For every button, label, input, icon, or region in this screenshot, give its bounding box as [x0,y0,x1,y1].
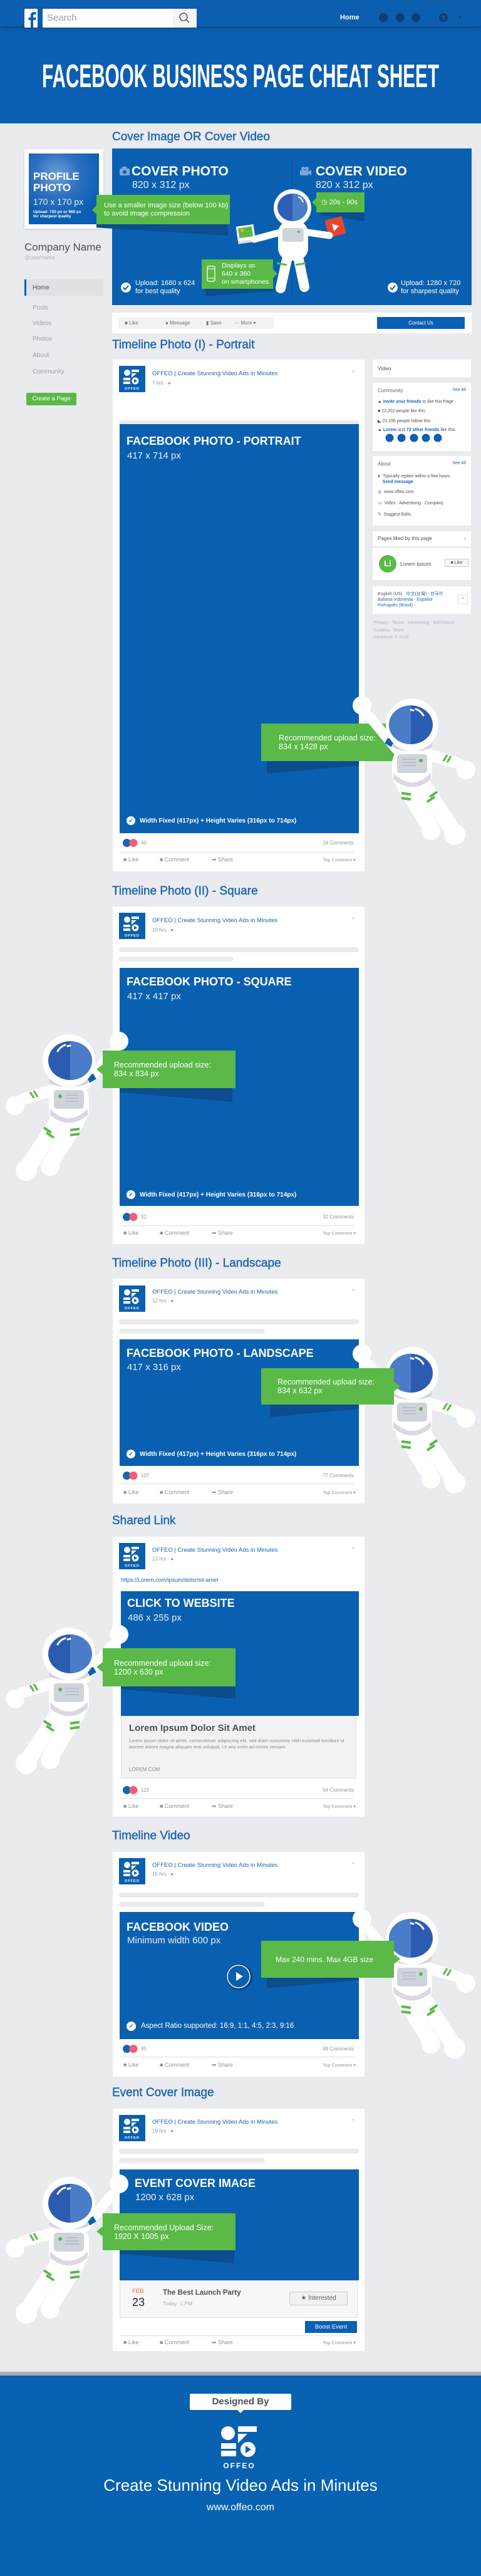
callout: 20s-90s: ◷ 20s - 90s [321,199,358,206]
post header: 19 hrs · ● [152,2128,173,2134]
upload note right: Upload: 1280 x 720 [401,279,460,287]
astronaut: square (left) [6,1032,128,1181]
post card: shared link [113,1537,365,1817]
upload note left [121,279,195,295]
post header [119,913,356,939]
sidebar: about: ✎ Suggest Edits [378,512,411,517]
post header: 10 hrs · ● [152,927,173,933]
sidebar: community [373,383,471,451]
boost event button: Boost Event [315,2324,347,2330]
profile photo box [24,149,103,229]
post header: OFFEO [125,1307,140,1311]
callout: event [103,2213,235,2250]
cover photo label [120,164,229,190]
callout: smartphones [202,259,273,289]
designed by badge: Designed By [212,2396,269,2407]
photo: square: FACEBOOK PHOTO - SQUARE [127,975,292,988]
designed by badge [190,2394,291,2410]
event info: FEB [132,2288,143,2295]
page action bar: ··· More ▾ [234,320,256,326]
post header: OFFEO [125,1879,140,1883]
photo icon [236,224,256,244]
post footer: portrait: ➦ Share [212,856,233,863]
callout: event: Recommended Upload Size: [114,2223,214,2231]
post card: landscape [113,1279,365,1504]
search box [43,9,197,28]
post footer: video: 48 Comments [323,2046,354,2052]
heading: event cover: Event Cover Image [112,2086,214,2099]
post footer: square: ■ Like [123,1230,138,1236]
callout: landscape: Recommended upload size: [277,1378,375,1386]
contact us button: Contact Us [408,320,433,326]
post footer: landscape: ➦ Share [212,1489,233,1495]
link preview text: LOREM.COM [129,1767,160,1772]
post card: shared link: Top Comment ▾ [323,1804,356,1809]
event cover frame [120,2169,359,2280]
photo: landscape: Width Fixed (417px) + Height Varies (316px to 714px) [140,1451,296,1458]
post header: OFFEO [125,387,140,391]
sidebar: community: ◣ 22,195 people follow this [378,419,430,423]
create a page button [26,393,76,405]
heading: square: Timeline Photo (II) - Square [112,885,258,898]
post header: ⌄ [351,1544,356,1550]
create a page button: Create a Page [32,395,71,402]
callout: portrait [261,724,394,761]
post card: shared link: ■ Like [123,1803,138,1809]
page action bar: ● Message [165,320,190,326]
sidebar: languages: + [461,595,465,601]
post footer: portrait: ■ Like [123,856,138,863]
callout: square [103,1051,235,1088]
sidebar: about: ◎ www.offeo.com [378,490,413,494]
post footer: video: Top Comment ▾ [323,2062,356,2068]
post card: shared link: ➦ Share [212,1803,233,1809]
post header [119,1285,356,1312]
post header: ⌄ [351,914,356,920]
video frame: Minimum width 600 px [127,1935,220,1946]
sidebar: languages: Bahasa Indonesia · Español [378,598,433,602]
callout: landscape: 834 x 632 px [277,1386,323,1395]
text: Lorem Ipsum [400,561,432,567]
sidebar: about: ● Typically replies within a few hours [378,474,450,479]
sidebar: about: ▭ Video · Advertising · Company [378,501,443,506]
post card: event: ➦ Share [212,2339,233,2345]
post footer: landscape: 77 Comments [323,1473,354,1478]
video frame [120,1912,359,2039]
cover box: 820 x 312 px [132,180,190,190]
post header: OFFEO | Create Stunning Video Ads in Minutes [152,1289,277,1296]
callout: 20s-90s [316,192,365,212]
post footer: landscape: ■ Like [123,1489,138,1495]
sidebar: about: Send message [383,480,413,484]
post footer: square: ➦ Share [212,1230,233,1236]
photo: square: 417 x 417 px [127,991,181,1002]
post footer: video: 85 [141,2046,147,2052]
post footer: landscape: Top Comment ▾ [323,1490,356,1495]
callout: video [261,1941,394,1978]
callout: video: Max 240 mins. Max 4GB size [276,1955,373,1963]
post footer: square: 32 Comments [323,1214,354,1220]
post footer: video: ■ Like [123,2062,138,2068]
sidebar: community: See All [452,388,466,392]
post card: square [113,906,365,1244]
cover box: COVER VIDEO [316,164,407,179]
post header: ⌄ [351,1285,356,1292]
footer [0,2372,481,2576]
search box: Search [47,13,77,23]
post footer: landscape [120,1472,356,1495]
post footer: video: ➦ Share [212,2062,233,2068]
post header: 7 hrs · ● [152,380,171,386]
post header: OFFEO [125,1564,140,1568]
event cover frame: 1200 x 628 px [135,2192,194,2203]
callout: square: Recommended upload size: [114,1061,211,1069]
post header [119,2115,356,2141]
profile photo box: Upload: 720 px or 960 px [33,210,81,214]
post footer: square: 52 [141,1214,147,1220]
sidebar: community: ■ 22,202 people like this [378,409,425,413]
post card: video [113,1852,365,2077]
callout: shared link [103,1648,235,1686]
astronaut: portrait (right) [353,697,475,845]
left nav menu: Videos [33,320,51,327]
contact us button [377,317,465,329]
sidebar: about: About [378,461,391,467]
link image: CLICK TO WEBSITE [127,1597,235,1609]
callout: smartphones: Displays as [222,262,256,269]
callout: shared link: 1200 x 630 px [114,1668,163,1676]
page action bar: ▮ Save [206,320,222,326]
post footer: video [120,2045,356,2068]
sidebar: video [373,360,471,377]
post footer: landscape: 107 [141,1473,149,1478]
post card: shared link: 54 Comments [323,1787,354,1793]
profile photo box: for sharpest quality [33,214,71,219]
post header: OFFEO [125,2136,140,2140]
photo: landscape: 417 x 316 px [127,1362,181,1373]
heading: portrait: Timeline Photo (I) - Portrait [112,338,254,351]
callout: portrait: Recommended upload size: [279,734,376,742]
post header [119,1858,356,1884]
callout: square: 834 x 834 px [114,1069,159,1078]
post header [119,366,356,392]
event info: The Best Launch Party [163,2289,241,2297]
callout: smartphones: 640 x 360 [222,270,251,278]
post header: 13 hrs · ● [152,1556,173,1562]
cover box: 820 x 312 px [316,180,373,190]
heading: landscape: Timeline Photo (III) - Landscape [112,1257,281,1270]
nav icons: ? [442,15,445,21]
sidebar: footer links: Facebook © 2018 [374,635,408,640]
sidebar: community: Community [378,388,403,393]
post header: OFFEO | Create Stunning Video Ads in Minutes [152,2119,277,2126]
reactions [123,1786,138,1794]
video frame: ✓ [129,2023,133,2029]
sidebar: about [373,456,471,526]
post card: event [113,2109,365,2351]
boost event button [305,2321,357,2333]
company name: Company Name [24,241,101,253]
post footer: portrait: ■ Comment [160,856,189,863]
photo: square: ✓ [128,1192,133,1198]
left nav menu: Photos [33,336,52,343]
nav icons [379,13,462,22]
post footer: square: Top Comment ▾ [323,1230,356,1236]
upload note left: for best quality [135,288,180,295]
text: @username [24,254,55,261]
event cover frame: EVENT COVER IMAGE [135,2177,256,2189]
post header: ⌄ [351,367,356,373]
text: ■ Like [450,561,462,565]
sidebar: footer links [374,620,457,640]
event info: 23 [132,2296,145,2309]
astronaut: video (right) [353,1909,475,2059]
photo: square: Width Fixed (417px) + Height Varies (316px to 714px) [140,1192,296,1198]
event info [120,2280,358,2318]
left nav menu [24,279,103,375]
post header: OFFEO | Create Stunning Video Ads in Minutes [152,917,277,924]
post footer: portrait: 24 Comments [323,840,354,846]
cover video label [300,164,407,190]
photo: portrait: ✓ [128,818,133,824]
heading: cover: Cover Image OR Cover Video [112,130,270,143]
video frame: FACEBOOK VIDEO [127,1921,229,1933]
sidebar: community: ▲ Invite your friends to like this Page [378,400,453,404]
post footer: video: ■ Comment [160,2062,189,2068]
arms [254,232,282,239]
icon: play button [226,1964,252,1990]
left nav menu: Posts [33,304,48,311]
post footer: portrait [120,839,356,863]
video frame: Aspect Ratio supported: 16:9, 1:1, 4:5, 2:3, 9:16 [141,2022,294,2030]
sidebar: pages liked: › [464,535,466,541]
post footer: square: ■ Comment [160,1230,189,1236]
event info: ★ Interested [301,2295,336,2302]
photo: square [120,968,359,1206]
photo: portrait: Width Fixed (417px) + Height Varies (316px to 714px) [140,818,296,824]
offeo logo [221,2426,257,2470]
post header: OFFEO | Create Stunning Video Ads in Minutes [152,1862,277,1869]
event info: Today 1 PM [163,2300,192,2307]
photo: landscape [120,1339,359,1466]
post card: event: ■ Like [123,2339,138,2345]
video icon [324,216,346,237]
sidebar: footer links: Cookies · More [374,628,403,633]
cover astronaut [235,189,346,293]
page action bar [112,313,472,333]
cover box: COVER PHOTO [132,164,229,179]
left nav menu: Home [33,284,49,291]
link url: https://Lorem.com/ipsum/dolor/sit-amet [121,1577,219,1583]
post footer: portrait: Top Comment ▾ [323,857,356,863]
post card: shared link: ■ Comment [160,1803,189,1809]
photo: landscape: FACEBOOK PHOTO - LANDSCAPE [127,1347,314,1359]
legs [281,257,287,288]
sidebar: languages: English (US) · 中文(台灣) · 한국어 [378,592,443,596]
website url: www.offeo.com [207,2502,274,2513]
post header: 15 hrs · ● [152,1871,173,1877]
link preview text: Lorem Ipsum Dolor Sit Amet [129,1723,256,1733]
sidebar: languages: Português (Brasil) · [378,603,415,608]
callout: smartphones: on smartphones [222,278,269,286]
link preview text [121,1716,356,1779]
callout: smaller image size [96,195,230,224]
profile photo box: 170 x 170 px [33,197,83,207]
callout: portrait: 834 x 1428 px [279,742,328,751]
post header: ⌄ [351,1859,356,1865]
text: Li [384,559,391,568]
link image: 486 x 255 px [128,1613,182,1623]
link image [121,1591,359,1716]
top navigation bar [0,0,481,26]
sidebar: video: Video [378,365,391,371]
post header [119,1543,356,1569]
post footer: square [120,1213,356,1236]
photo: portrait [120,424,359,833]
post footer: portrait: 40 [141,840,147,846]
cover box [112,148,472,305]
post header: OFFEO [125,934,140,938]
body [278,221,308,261]
shadows [96,224,228,236]
sidebar: footer links: Privacy · Terms · Advertising · AdChoices · [374,621,457,625]
heading: timeline video: Timeline Video [112,1829,190,1842]
upload note left: Upload: 1680 x 624 [135,279,195,287]
icon: facebook logo [24,9,38,28]
post header: ⌄ [351,2116,356,2122]
post card: event: Top Comment ▾ [323,2340,356,2345]
astronaut: shared link (left) [6,1625,128,1774]
sidebar: pages liked: Pages liked by this page [378,536,432,541]
profile photo box: PROFILE [33,170,80,182]
post footer: landscape: ■ Comment [160,1489,189,1495]
sidebar: community: ▲ Lorem and 72 other friends like this [378,428,455,432]
callout: smaller image size: to avoid image compression [104,209,190,217]
callout: smaller image size: Use a smaller image size (below 100 kb) [104,202,228,209]
post header: OFFEO | Create Stunning Video Ads in Minutes [152,370,277,377]
post header: OFFEO | Create Stunning Video Ads in Minutes [152,1547,277,1554]
astronaut: event (left) [6,2174,128,2324]
sidebar: languages [373,586,471,614]
tagline: Create Stunning Video Ads in Minutes [103,2476,378,2495]
photo: landscape: ✓ [128,1451,133,1457]
photo: portrait: FACEBOOK PHOTO - PORTRAIT [127,435,301,447]
post card: shared link: 122 [141,1787,149,1793]
post card: event: ■ Comment [160,2339,189,2345]
title band [0,26,481,123]
left nav menu: Community [33,368,65,375]
sidebar: pages liked [373,531,471,546]
helmet [274,189,311,227]
sidebar: about: See All [452,461,466,465]
post card: portrait [113,360,365,871]
callout: shared link: Recommended upload size: [114,1659,211,1668]
callout: event: 1920 X 1005 px [114,2231,169,2240]
page action bar: ■ Like [125,320,138,326]
upload note right: for sharpest quality [401,288,459,295]
photo: portrait: 417 x 714 px [127,450,181,461]
astronaut: landscape (right) [353,1344,475,1493]
profile photo box: PHOTO [33,182,71,194]
post header: 12 hrs · ● [152,1298,173,1304]
link preview text: Lorem ipsum dolor sit amet, consectetuer adipiscing elit, sed diam nonummy nibh euismod tincidunt ut laoreet dolore magna aliquam erat volutpat. Ut wisi enim ad minim veniam. [129,1738,344,1749]
heading: shared link: Shared Link [112,1514,175,1527]
nav: home link: Home [340,14,359,21]
left nav menu: About [33,352,49,359]
callout: landscape [261,1368,394,1405]
upload note right [388,279,460,295]
